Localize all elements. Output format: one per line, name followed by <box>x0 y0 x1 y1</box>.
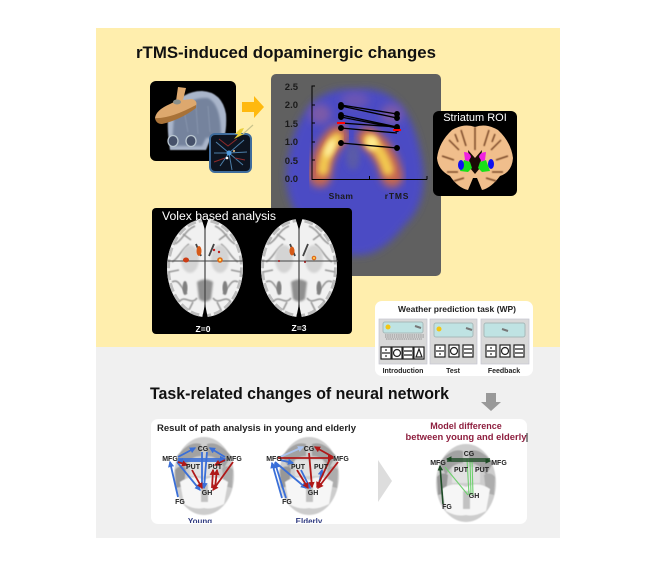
axis tick labels: 0.0 <box>285 174 298 185</box>
bar chart axes <box>312 86 427 180</box>
icon: lightning bolt <box>234 128 244 139</box>
yellow background panel <box>96 28 560 347</box>
brain network: elderly <box>266 437 349 515</box>
brain network: elderly: PUT <box>314 464 329 471</box>
screen captions: Feedback <box>488 368 520 375</box>
brain network: elderly: PUT <box>291 464 306 471</box>
panel heading: Result of path analysis in young and elderly <box>157 423 356 433</box>
brain network: difference <box>430 444 507 522</box>
category labels: Sham <box>329 191 353 201</box>
arrow: chevron <box>378 460 392 502</box>
head MRI <box>168 91 226 150</box>
brain network: young: PUT <box>186 464 201 471</box>
brain network: young: MFG <box>226 456 242 463</box>
panel: Voxel based analysis: Z=3 <box>292 323 307 333</box>
brain network: young: MFG <box>162 456 178 463</box>
panel: Striatum ROI <box>433 111 517 196</box>
slice labels: Z=0 <box>196 324 211 334</box>
brain network: elderly: MFG <box>266 456 282 463</box>
caption: Young: Young <box>188 517 212 526</box>
brain network: difference: MFG <box>491 460 507 467</box>
panel: PET image with chart <box>271 74 441 276</box>
arrow: down <box>481 393 501 411</box>
brain network: elderly: MFG <box>333 456 349 463</box>
panel: PET image with chart: rTMS <box>385 191 409 201</box>
panel: Voxel based analysis <box>152 208 352 334</box>
gray background panel <box>96 347 560 538</box>
brain network: difference: PUT <box>454 467 469 474</box>
panel: TMS coil on head MRI <box>150 81 236 161</box>
heading line two: between young and elderly <box>406 432 526 442</box>
arrow: to PET <box>242 96 264 118</box>
ROI colours <box>464 152 471 162</box>
brain network: elderly: FG <box>282 499 292 506</box>
screen: test <box>430 319 477 364</box>
screen captions: Test <box>446 368 461 375</box>
mean markers <box>337 123 401 130</box>
brain network: difference: FG <box>442 504 452 511</box>
screen captions: Introduction <box>383 368 423 375</box>
label: Striatum ROI <box>443 112 507 124</box>
axis tick labels <box>285 82 299 185</box>
PET heat map <box>286 89 424 255</box>
panel: path analysis <box>151 419 527 526</box>
axis tick labels: 2.5 <box>285 82 299 93</box>
brain slice Z=3 <box>261 217 338 319</box>
screen: feedback <box>481 319 529 364</box>
brain network: elderly: GH <box>308 490 318 497</box>
screen: introduction <box>379 319 427 364</box>
TMS coil <box>155 87 196 122</box>
caption: Elderly: Elderly <box>296 517 323 526</box>
axis tick labels: 1.0 <box>285 137 298 148</box>
faint blue arrow <box>280 447 303 457</box>
brain network: difference: PUT <box>475 467 490 474</box>
icon: neuron stimulation inset <box>210 125 253 172</box>
brain network: difference: CG <box>464 451 475 458</box>
brain network: young: GH <box>202 490 212 497</box>
brain network: young: FG <box>175 499 185 506</box>
axis tick labels: 2.0 <box>285 100 298 111</box>
panel: Weather prediction task <box>375 301 533 376</box>
axis tick labels: 1.5 <box>285 119 299 130</box>
screen captions <box>383 368 520 375</box>
paired data lines <box>339 103 399 150</box>
brain slice Z=0 <box>167 217 243 319</box>
brain network: young: CG <box>198 446 209 453</box>
brain network: young <box>162 437 242 515</box>
heading: model difference: Model difference <box>430 421 502 431</box>
brain network: difference: GH <box>469 493 479 500</box>
title: rTMS-induced dopaminergic changes: rTMS-induced dopaminergic changes <box>136 44 436 62</box>
brain network: difference: MFG <box>430 460 446 467</box>
axis tick labels: 0.5 <box>285 156 299 167</box>
panel title: Volex based analysis <box>162 211 276 223</box>
panel heading: Weather prediction task (WP) <box>398 304 516 314</box>
title: Task-related changes of neural network: Task-related changes of neural network <box>150 385 450 403</box>
coronal brain slice <box>437 126 513 190</box>
brain network: elderly: CG <box>304 446 315 453</box>
brain network: young: PUT <box>208 464 223 471</box>
